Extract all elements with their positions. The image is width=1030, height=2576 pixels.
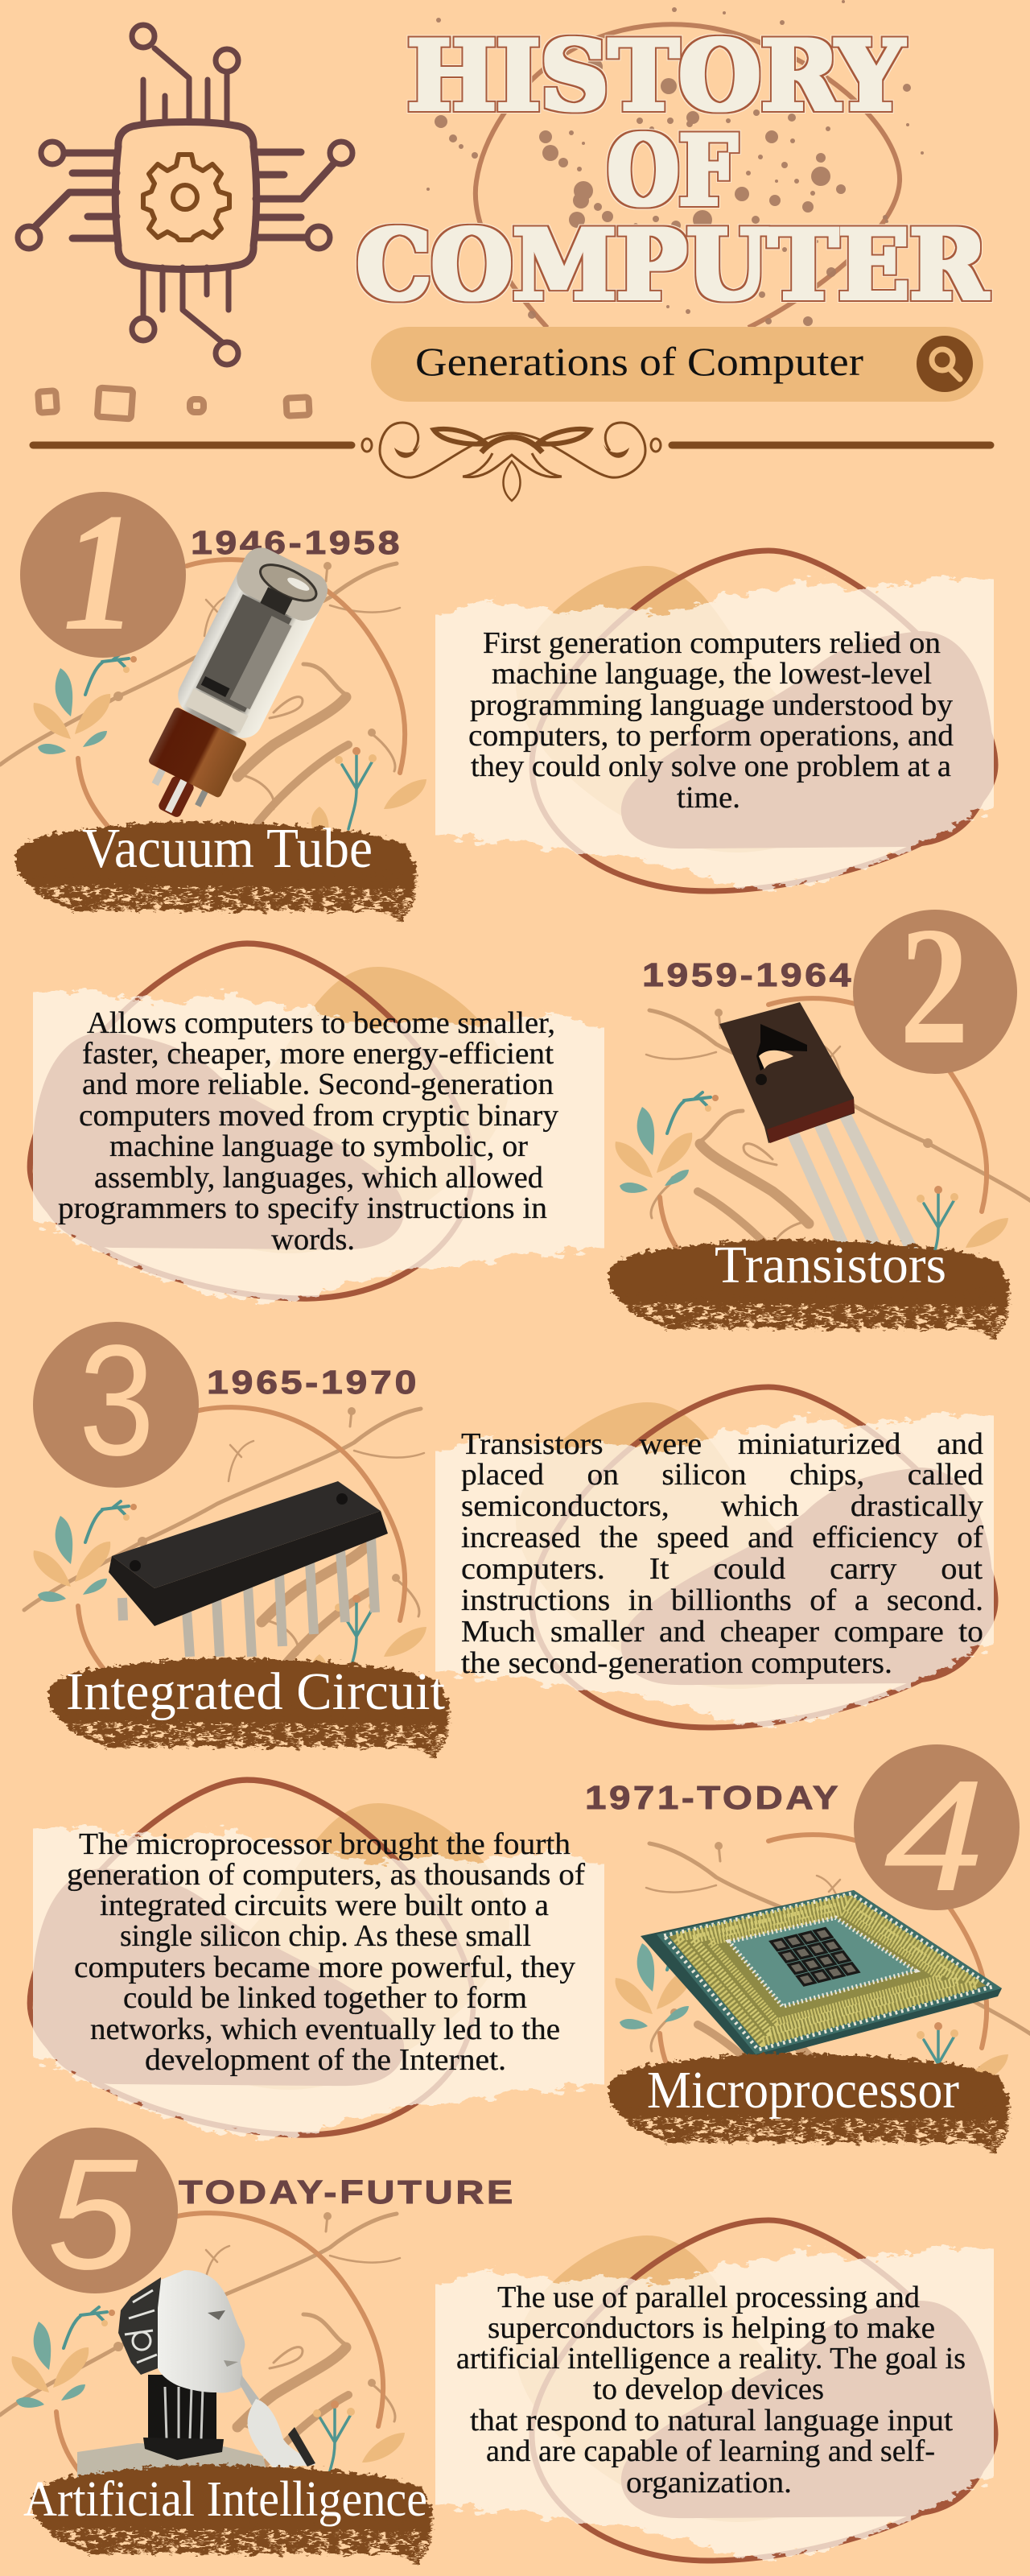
panel: generation 3 integrated circuit (24, 1312, 450, 1759)
panel: generation 5 text card: to develop devices (593, 2372, 824, 2406)
panel: generation 2 text card (12, 943, 621, 1302)
number badge 2 (853, 893, 1017, 1080)
panel: generation 4 text card: integrated circuits were built onto a (100, 1889, 549, 1922)
panel: generation 4 text card: networks, which eventually led to the (90, 2013, 560, 2046)
panel: generation 4 microprocessor (585, 1744, 1030, 2154)
panel: generation 1 text card (418, 551, 1014, 891)
date 1971-TODAY: 1971-TODAY (585, 1779, 841, 1816)
integrated circuit image (109, 1481, 388, 1657)
vacuum tube image (127, 542, 334, 833)
panel: generation 3 text card: Much smaller and cheaper compare to (461, 1615, 983, 1649)
label: Microprocessor: Microprocessor (647, 2061, 959, 2120)
number badge 1 (20, 479, 186, 666)
label: Artificial Intelligence: Artificial Intelligence (23, 2472, 427, 2527)
robot image (77, 2270, 315, 2483)
panel: generation 3 text card: Transistors were miniaturized and (461, 1427, 983, 1461)
panel: generation 1 text card: First generation computers relied on (483, 626, 941, 660)
panel: generation 1 text card: time. (677, 781, 740, 815)
panel: generation 5 artificial intelligence (0, 2126, 516, 2566)
date 1959-1964: 1959-1964 (642, 956, 854, 993)
panel: generation 3 text card: computers. It could carry out (461, 1552, 983, 1586)
panel: generation 1 text card: machine language, the lowest-level (492, 657, 932, 691)
title (356, 19, 988, 322)
panel: generation 2 text card: assembly, languages, which allowed (94, 1161, 543, 1195)
icon: circuit chip with gear (18, 25, 352, 365)
decorative squares (38, 388, 310, 419)
panel: generation 4 text card: could be linked together to form (123, 1981, 527, 2015)
panel: generation 4 text card (12, 1780, 621, 2139)
date TODAY-FUTURE: TODAY-FUTURE (179, 2174, 516, 2211)
panel: generation 5 text card: and are capable of learning and self- (486, 2434, 935, 2468)
panel: generation 5 text card: artificial intelligence a reality. The goal is (456, 2342, 966, 2376)
transistor image (719, 1002, 911, 1248)
panel: generation 1 vacuum tube (0, 479, 426, 923)
panel: generation 3 text card: placed on silicon chips, called (461, 1458, 983, 1492)
label: Transistors: Transistors (715, 1236, 946, 1294)
icon: magnifier (917, 336, 973, 392)
panel: generation 3 text card: semiconductors, which drastically (461, 1489, 983, 1523)
microprocessor image (641, 1890, 1002, 2061)
panel: generation 1 text card: computers, to perform operations, and (468, 719, 954, 753)
panel: generation 3 text card (418, 1387, 1014, 1728)
number badge 5: 5 (47, 2126, 138, 2302)
panel: generation 5 text card: The use of parallel processing and (497, 2281, 920, 2314)
ornamental divider (33, 423, 991, 501)
panel: generation 2 text card: and more reliable. Second-generation (82, 1067, 554, 1101)
number badge 2: 2 (900, 893, 969, 1080)
panel: generation 4 text card: development of the Internet. (145, 2043, 506, 2077)
panel: generation 4 text card: generation of computers, as thousands of (67, 1858, 585, 1892)
panel: generation 1 text card: programming language understood by (470, 688, 953, 722)
title: HISTORY (407, 19, 904, 133)
panel: generation 5 text card: organization. (626, 2466, 792, 2500)
number badge 1: 1 (63, 479, 138, 666)
number badge 5 (12, 2126, 178, 2302)
panel: generation 3 text card: instructions in billionths of a second. (461, 1583, 983, 1617)
search bar (371, 327, 983, 402)
number badge 3: 3 (79, 1312, 154, 1488)
panel: generation 2 text card: computers moved from cryptic binary (79, 1099, 558, 1133)
label: Vacuum Tube: Vacuum Tube (82, 818, 373, 880)
search bar label: Generations of Computer (415, 339, 863, 384)
panel: generation 2 transistors (608, 893, 1030, 1340)
number badge 4 (854, 1744, 1020, 1924)
title: OF (608, 114, 737, 228)
number badge 3 (33, 1312, 199, 1488)
label: Integrated Circuit: Integrated Circuit (66, 1662, 445, 1721)
panel: generation 2 text card: words. (271, 1223, 355, 1257)
panel: generation 4 text card: single silicon chip. As these small (120, 1919, 531, 1953)
date 1946-1958: 1946-1958 (191, 524, 402, 561)
panel: generation 4 text card: The microprocessor brought the fourth (79, 1827, 571, 1861)
header illustration: ink splatter and ring (426, 0, 924, 328)
panel: generation 3 text card: the second-generation computers. (461, 1646, 892, 1680)
panel: generation 2 text card: Allows computers to become smaller, (87, 1006, 555, 1040)
number badge 4: 4 (884, 1748, 985, 1924)
panel: generation 2 text card: faster, cheaper, more energy-efficient (82, 1037, 554, 1071)
panel: generation 2 text card: programmers to specify instructions in (58, 1191, 547, 1225)
panel: generation 1 text card: they could only solve one problem at a (471, 749, 951, 783)
title: COMPUTER (356, 208, 988, 322)
panel: generation 5 text card: that respond to natural language input (470, 2404, 953, 2438)
date 1965-1970: 1965-1970 (207, 1364, 419, 1401)
panel: generation 5 text card (418, 2220, 1014, 2561)
panel: generation 4 text card: computers became more powerful, they (74, 1951, 575, 1984)
panel: generation 3 text card: increased the speed and efficiency of (461, 1521, 983, 1554)
panel: generation 5 text card: superconductors is helping to make (488, 2311, 935, 2345)
panel: generation 2 text card: machine language to symbolic, or (109, 1129, 528, 1163)
